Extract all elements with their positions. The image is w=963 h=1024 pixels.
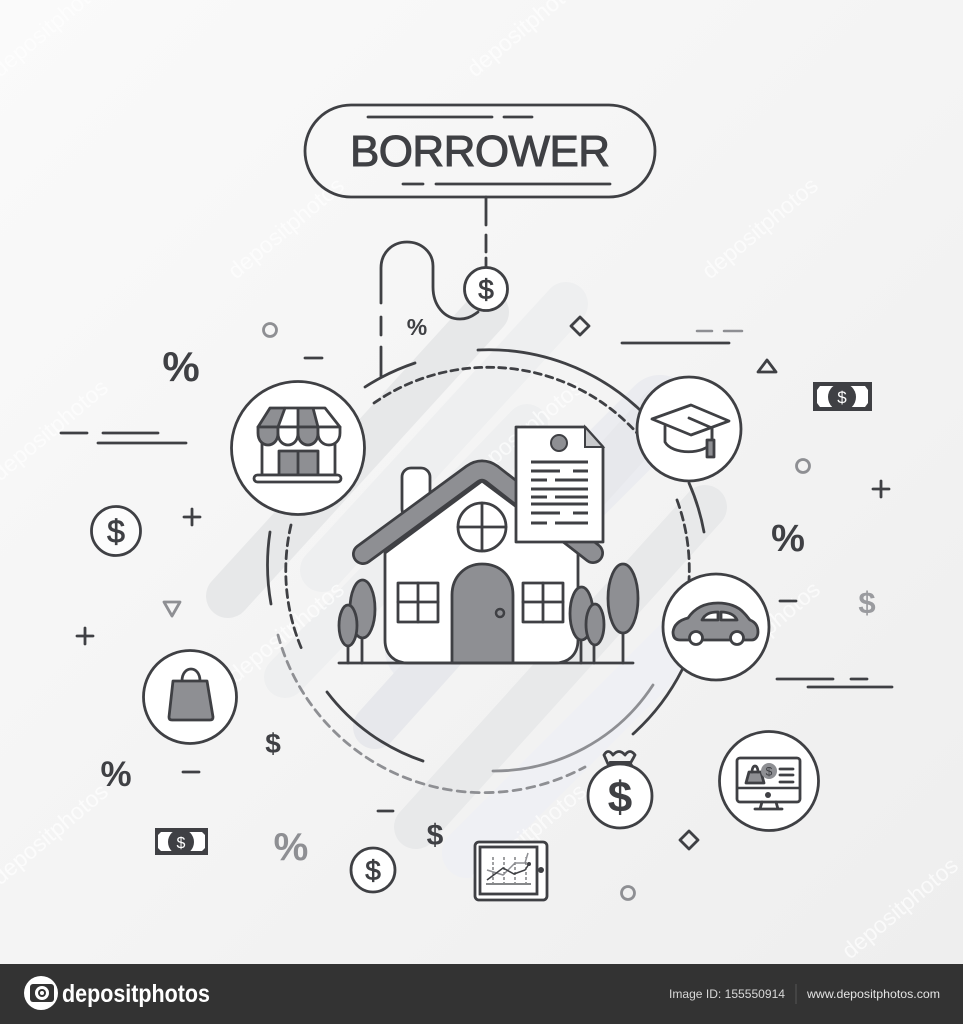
site url: www.depositphotos.com (806, 987, 940, 1001)
icon: banknote right: $ (837, 388, 847, 407)
icon: money bag: $ (608, 773, 632, 822)
percent signs: % (162, 343, 200, 390)
icon: chimney (402, 468, 430, 518)
icon: computer (720, 732, 818, 830)
dollar signs: $ (427, 819, 444, 852)
diamonds (571, 317, 698, 849)
hanging coin: $ (478, 274, 494, 305)
dashed connector from title to coin (485, 197, 487, 268)
percent signs: % (274, 826, 308, 869)
dollar signs: $ (265, 728, 281, 759)
image id: Image ID: 155550914 (669, 987, 785, 1001)
window left (398, 583, 438, 622)
icon: store (232, 382, 364, 514)
decorative lines (61, 343, 892, 687)
icon: graduation cap (637, 377, 741, 481)
watermark: depositphotos (465, 778, 591, 890)
icon: document (516, 427, 603, 542)
icon: banknote right (813, 382, 872, 411)
watermark: depositphotos (462, 374, 588, 486)
curved connector line (381, 242, 478, 377)
watermark: depositphotos (223, 172, 349, 284)
logo text: depositphotos (62, 980, 210, 1008)
icon: money bag (588, 752, 652, 828)
dollar signs: $ (858, 585, 876, 620)
percent signs: % (407, 314, 427, 340)
house body (385, 481, 578, 663)
percent signs: % (100, 755, 132, 794)
round window (458, 503, 506, 551)
percent signs: % (771, 518, 805, 560)
roof (363, 470, 593, 554)
hanging coin (464, 268, 508, 310)
icon: banknote left: $ (177, 835, 186, 852)
title: BORROWER (350, 127, 610, 176)
footer bar (0, 964, 963, 1024)
icon: computer: $ (766, 764, 773, 778)
icon: coin left (92, 506, 140, 556)
icon: coin bottom: $ (365, 855, 381, 886)
watermark: depositphotos (697, 172, 823, 284)
door (452, 564, 513, 663)
icon: coin left: $ (107, 514, 125, 550)
icon: trees right (570, 564, 638, 663)
icon: banknote left (155, 828, 208, 855)
dollar signs (265, 585, 876, 852)
icon: trees left (339, 580, 375, 663)
icon: coin bottom (351, 848, 395, 892)
icon: house (339, 468, 638, 663)
watermark: depositphotos (699, 576, 825, 688)
triangles (164, 360, 776, 616)
watermark: depositphotos (837, 852, 963, 964)
watermark: depositphotos (223, 576, 349, 688)
window right (523, 583, 563, 622)
gray rings (264, 324, 810, 900)
ground line (339, 662, 633, 664)
logo mark (24, 976, 58, 1010)
icon: shopping bag (144, 650, 236, 744)
diagonal background bands (228, 304, 705, 853)
plus and minus marks (77, 358, 889, 811)
title pill (305, 105, 655, 197)
central ring arcs (268, 350, 704, 793)
icon: car (663, 574, 769, 680)
icon: tablet chart (475, 842, 547, 900)
percent signs (100, 314, 805, 869)
